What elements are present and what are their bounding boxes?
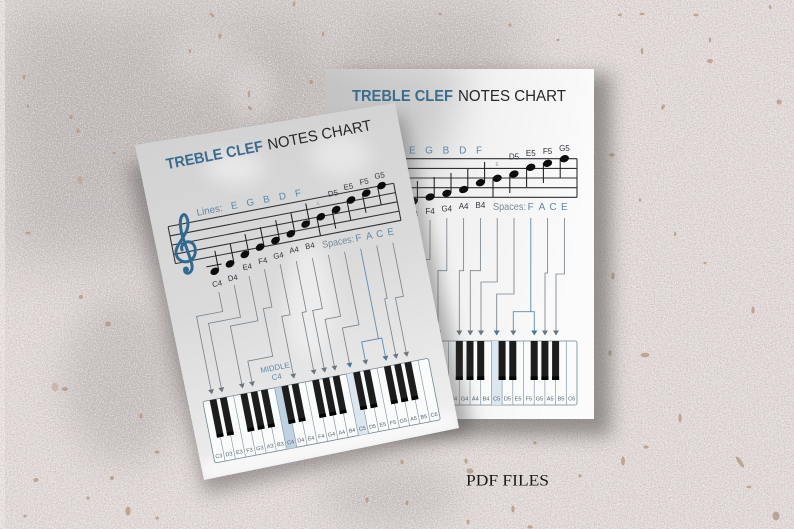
front page key labels: C3 [215,453,223,460]
front page note and mnemonic labels: G4 [272,250,285,261]
front page note and mnemonic labels: D [278,191,287,203]
back page key labels: B5 [557,396,564,402]
front page key labels: F4 [318,434,325,441]
back page key labels: E4 [440,396,447,402]
back page note and mnemonic labels: B4 [476,201,486,210]
back page note and mnemonic labels: G5 [559,144,570,153]
front page key labels: C6 [430,412,438,419]
front page key labels: G5 [399,418,408,425]
front page note and mnemonic labels: A [365,230,374,243]
front page key labels: C5 [358,426,366,433]
front page key labels: B5 [420,414,428,421]
back page note and mnemonic labels: C [549,202,557,213]
back page key labels: G3 [386,396,394,402]
back page title: NOTES CHART [458,88,567,105]
front page key labels: D5 [369,424,377,431]
back page note and mnemonic labels: E [496,162,500,168]
back page note and mnemonic labels: G [425,146,433,156]
front page note and mnemonic labels: G5 [374,170,386,181]
back page key labels: A4 [472,396,479,402]
front page key labels: G3 [256,445,264,453]
front page note and mnemonic labels: Spaces: [321,234,355,251]
front page connector arrows [187,243,415,395]
front page note and mnemonic labels: D4 [227,273,239,283]
back page note and mnemonic labels: D5 [509,153,520,162]
front page note and mnemonic labels: G [246,197,255,209]
front page note and mnemonic labels: E4 [242,261,253,272]
back page key labels: F4 [451,396,457,402]
back page key labels: G4 [461,396,468,402]
back page key labels: D4 [429,396,436,402]
back page key labels: E5 [515,396,522,402]
caption: PDF FILES: PDF FILES [466,472,549,490]
back page title: TREBLE CLEF [352,88,453,105]
icon: treble clef [176,215,195,273]
back page key labels: D3 [354,396,361,402]
front page note and mnemonic labels: D5 [327,188,339,199]
back page staff [342,159,577,197]
back page note and mnemonic labels [373,144,570,230]
front page note and mnemonic labels: B4 [304,240,316,251]
back page keyboard [342,341,577,405]
back page key labels: F5 [526,396,532,402]
front page key labels: F3 [246,447,253,454]
front page note and mnemonic labels: F4 [257,256,269,266]
back page key labels: C6 [568,396,575,402]
back page notes [372,154,570,217]
front page key labels: G4 [328,431,336,439]
front page key labels: E4 [307,435,315,443]
back page key labels: C3 [343,396,351,402]
back page key labels: C5 [493,396,500,402]
back page note and mnemonic labels: C4 [374,221,385,230]
middle C4 label [260,361,292,384]
panel: back page [325,69,594,419]
back page note and mnemonic labels: Spaces: [493,202,526,213]
panel: front page [135,103,459,480]
back page note and mnemonic labels: A4 [459,202,469,211]
back page note and mnemonic labels: E5 [526,149,536,158]
front page keyboard [203,358,440,463]
front page note and mnemonic labels: C [375,228,384,241]
back page note and mnemonic labels: F [476,146,482,156]
back page note and mnemonic labels: A [539,202,546,213]
front page key labels: C4 [287,439,295,447]
back page note and mnemonic labels: E4 [408,210,419,219]
back page key labels: G5 [536,396,543,402]
shadow: back page [345,74,611,436]
back page key labels: B4 [483,396,489,402]
back page note and mnemonic labels: D4 [391,218,402,227]
back page key labels: C4 [418,396,425,402]
back page note and mnemonic labels: G4 [441,205,453,214]
front page note and mnemonic labels: A4 [288,245,300,255]
front page title: NOTES CHART [266,117,373,154]
back page note and mnemonic labels: Lines: [373,146,400,156]
shadow: front page [128,115,472,494]
back page key labels: D5 [504,396,511,402]
front page notes [196,180,398,277]
back page note and mnemonic labels: F5 [543,147,553,156]
front page key labels: B3 [277,441,284,449]
front page chart content [155,115,440,463]
front page key labels: A3 [266,443,274,450]
front page note and mnemonic labels: B [262,194,271,206]
front page staff [168,183,401,264]
front page note and mnemonic labels: E5 [343,181,355,192]
front page key labels: A5 [410,416,418,423]
back page key labels: A3 [397,396,404,402]
front page key labels: E3 [236,449,243,456]
back page key labels: B3 [408,396,415,402]
back page title [352,88,567,105]
front page key labels: D3 [225,451,233,458]
front page note and mnemonic labels: F5 [359,176,370,187]
back page note and mnemonic labels: D [459,146,466,156]
front page note and mnemonic labels: F [355,233,363,245]
back page note and mnemonic labels: E [409,146,416,156]
front page note and mnemonic labels: E [230,200,239,212]
back page note and mnemonic labels: F [528,202,534,213]
front page note and mnemonic labels [195,170,401,289]
back page connector arrows [349,218,564,336]
middle C4 label: C4 [271,371,283,382]
front page note and mnemonic labels: E [386,226,395,238]
front page key labels: A4 [338,430,346,437]
back page key labels: F3 [376,396,382,402]
back page note and mnemonic labels: F4 [425,207,435,216]
back page note and mnemonic labels: E [561,202,568,213]
front page key labels: F5 [389,420,397,427]
front page note and mnemonic labels: C4 [211,278,224,289]
front page key labels: B4 [348,428,356,435]
front page note and mnemonic labels: E [316,201,321,207]
back page note and mnemonic labels: B [443,146,450,156]
front page title: TREBLE CLEF [165,138,265,173]
back page key labels: E3 [365,396,372,402]
front page note and mnemonic labels: Lines: [196,203,224,219]
front page title [165,117,373,173]
back page key labels: A5 [547,396,554,402]
front page key labels: E5 [379,422,387,429]
front page key labels: D4 [297,437,305,445]
front page note and mnemonic labels: F [294,188,302,200]
middle C4 label: MIDDLE [260,361,290,375]
